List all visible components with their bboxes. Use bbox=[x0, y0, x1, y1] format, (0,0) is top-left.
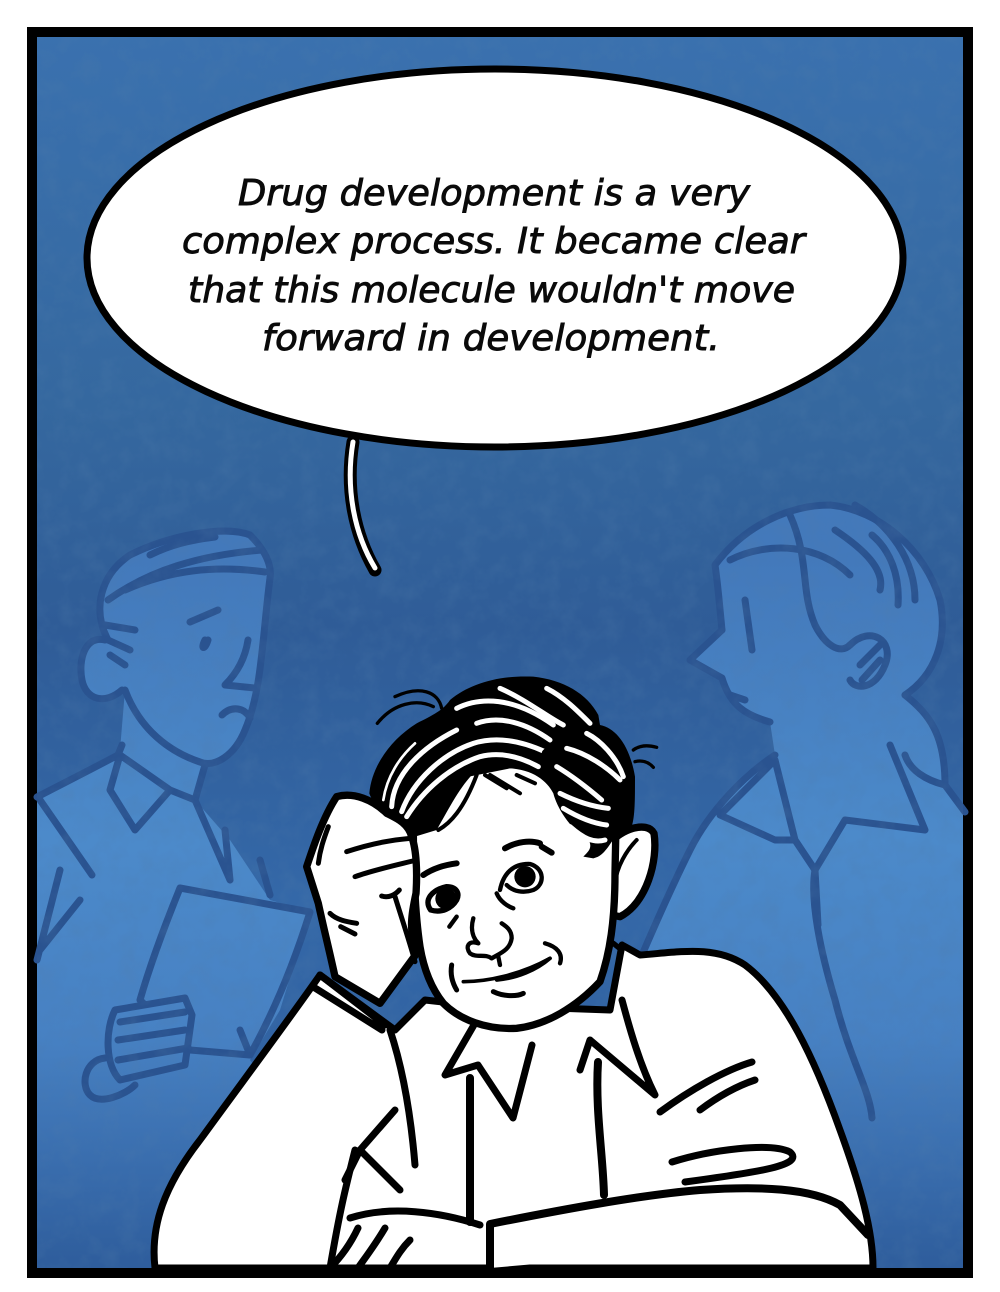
figure: right colleague in blue bbox=[642, 505, 965, 1268]
collar shadow neck line bbox=[613, 943, 622, 950]
fist bbox=[307, 795, 417, 1003]
speech text bbox=[182, 173, 807, 359]
speech text: forward in development. bbox=[262, 318, 720, 359]
face bbox=[413, 760, 617, 1029]
speech bubble bbox=[87, 69, 903, 570]
head, fist and hair bbox=[307, 676, 657, 1029]
brow, eyes, nose and mouth bbox=[423, 842, 561, 996]
forelock strokes bbox=[438, 775, 535, 830]
speech bubble tail bbox=[350, 442, 375, 570]
shirt and torso bbox=[154, 945, 873, 1268]
ear bbox=[603, 827, 655, 917]
hair parting bbox=[546, 726, 575, 753]
figure: left colleague in blue bbox=[37, 531, 400, 1268]
speech text: complex process. It became clear bbox=[182, 221, 807, 262]
speech text: Drug development is a very bbox=[238, 173, 751, 214]
speech text: that this molecule wouldn't move bbox=[188, 270, 795, 311]
hair mass bbox=[369, 676, 635, 858]
hair highlights bbox=[383, 688, 623, 841]
figure: scientist in white shirt bbox=[154, 676, 873, 1268]
stray hairs bbox=[377, 691, 657, 767]
